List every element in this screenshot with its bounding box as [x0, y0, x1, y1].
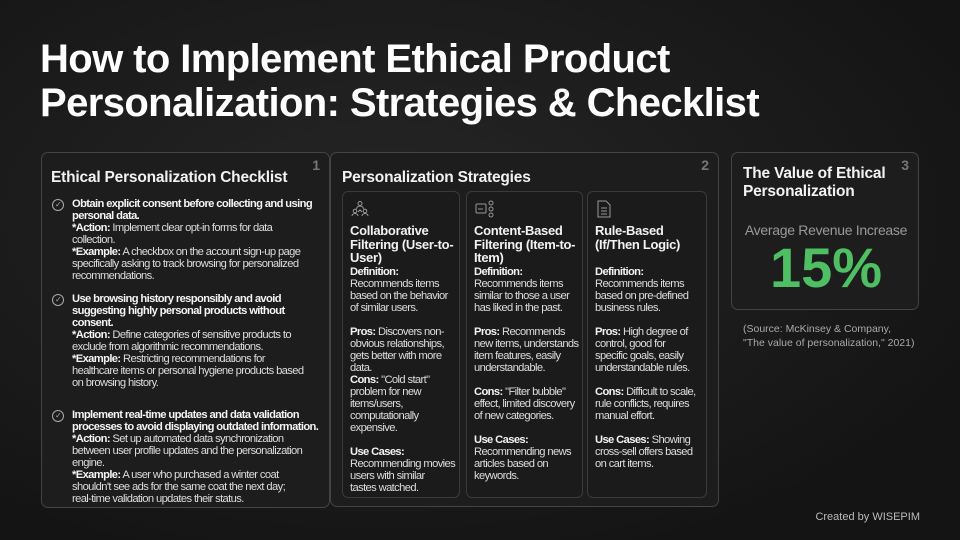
card: collaborative: Recommending movies — [350, 458, 455, 470]
checklist item 2 — [52, 293, 304, 389]
checklist item 2: exclude from algorithmic recommendations. — [72, 341, 263, 353]
card: collaborative: based on the behavior — [350, 290, 448, 302]
card: content-based: similar to those a user — [474, 290, 569, 302]
title: Personalization: Strategies & Checklist — [40, 81, 759, 125]
card: content-based: Cons: "Filter bubble" — [474, 386, 565, 398]
heading: value: Personalization — [743, 183, 855, 200]
panel: checklist — [41, 152, 330, 508]
card: rule-based: Definition: — [595, 266, 643, 278]
card: content-based: new items, understands — [474, 338, 579, 350]
card: content-based: Recommends items — [474, 278, 563, 290]
card: collaborative: Use Cases: — [350, 446, 404, 458]
stat label: Average Revenue Increase — [745, 222, 907, 238]
title — [40, 37, 760, 125]
card: rule-based: on cart items. — [595, 458, 653, 470]
heading: value: The Value of Ethical — [743, 165, 885, 182]
card: content-based: has liked in the past. — [474, 302, 562, 314]
card: collaborative: users with similar — [350, 470, 425, 482]
card: collaborative: Cons: "Cold start" — [350, 374, 429, 386]
card: collaborative: Recommends items — [350, 278, 439, 290]
card: rule-based: business rules. — [595, 302, 660, 314]
checklist item 1: *Example: A checkbox on the account sign-up page — [72, 246, 300, 258]
card: content-based: item features, easily — [474, 350, 560, 362]
heading: value — [743, 165, 885, 200]
checklist item 1 — [52, 198, 312, 282]
panel: value — [731, 152, 919, 310]
card: collaborative: obvious relationships, — [350, 338, 444, 350]
source note: "The value of personalization," 2021) — [743, 337, 914, 349]
card: collaborative: computationally — [350, 410, 418, 422]
checklist item 3 — [52, 409, 318, 505]
heading: strategies: Personalization Strategies — [342, 169, 531, 186]
card: content-based: Recommending news — [474, 446, 571, 458]
panel: checklist: ✓ — [55, 295, 61, 304]
checklist item 3: engine. — [72, 457, 104, 469]
card: collaborative: Pros: Discovers non- — [350, 326, 444, 338]
card: rule-based: Pros: High degree of — [595, 326, 688, 338]
card: content-based: of new categories. — [474, 410, 554, 422]
heading: checklist: Ethical Personalization Checklist — [51, 169, 287, 186]
card: collaborative: items/users, — [350, 398, 403, 410]
checklist item 1: Obtain explicit consent before collecting and using — [72, 198, 312, 210]
card: collaborative: data. — [350, 362, 372, 374]
checklist item 1: collection. — [72, 234, 115, 246]
stat: 15%: 15% — [770, 236, 882, 299]
checklist item 3: shouldn't see ads for the same coat the next day; — [72, 481, 285, 493]
checklist item 3: processes to avoid displaying outdated information. — [72, 421, 318, 433]
card: collaborative: Definition: — [350, 266, 398, 278]
card: content-based: effect, limited discovery — [474, 398, 575, 410]
checklist item 2: consent. — [72, 317, 113, 329]
checklist item 2: healthcare items or personal hygiene products based — [72, 365, 303, 377]
card: rule-based: cross-sell offers based — [595, 446, 692, 458]
card: content-based — [466, 191, 583, 498]
card: rule-based: understandable rules. — [595, 362, 690, 374]
card: collaborative: tastes watched. — [350, 482, 418, 494]
card: rule-based: rule conflicts, requires — [595, 398, 689, 410]
checklist item 3: Implement real-time updates and data validation — [72, 409, 299, 421]
checklist item 2: suggesting highly personal products without — [72, 305, 285, 317]
card: content-based: Use Cases: — [474, 434, 528, 446]
card: content-based: Filtering (Item-to- — [474, 236, 575, 252]
checklist item 2: *Action: Define categories of sensitive products to — [72, 329, 291, 341]
card: content-based: articles based on — [474, 458, 548, 470]
source note: (Source: McKinsey & Company, — [743, 323, 891, 335]
checklist item 2: on browsing history. — [72, 377, 158, 389]
card: rule-based — [587, 191, 707, 498]
card: rule-based: specific goals, easily — [595, 350, 683, 362]
icon: document — [598, 200, 610, 218]
card: rule-based: Cons: Difficult to scale, — [595, 386, 696, 398]
card: content-based: Definition: — [474, 266, 522, 278]
card: rule-based: manual effort. — [595, 410, 655, 422]
checklist item 3: between user profile updates and the personalization — [72, 445, 302, 457]
card: collaborative: gets better with more — [350, 350, 441, 362]
panel: value: 3 — [901, 157, 909, 173]
card: rule-based: (If/Then Logic) — [595, 236, 680, 252]
panel: strategies — [330, 152, 719, 507]
card: content-based: Pros: Recommends — [474, 326, 565, 338]
card: collaborative: expensive. — [350, 422, 397, 434]
card: collaborative: of similar users. — [350, 302, 418, 314]
checklist item 2: *Example: Restricting recommendations for — [72, 353, 265, 365]
icon: users — [352, 201, 368, 216]
card: content-based: understandable. — [474, 362, 545, 374]
source note — [743, 323, 914, 349]
checklist item 3: *Action: Set up automated data synchronization — [72, 433, 284, 445]
checklist item 1: recommendations. — [72, 270, 154, 282]
card: rule-based: control, good for — [595, 338, 665, 350]
card: collaborative — [342, 191, 460, 498]
card: rule-based: Use Cases: Showing — [595, 434, 690, 446]
card: content-based: keywords. — [474, 470, 519, 482]
checklist item 3: *Example: A user who purchased a winter coat — [72, 469, 279, 481]
panel: checklist: 1 — [312, 157, 320, 173]
panel: checklist: ✓ — [55, 411, 61, 420]
card: content-based: Content-Based — [474, 223, 563, 238]
card: content-based: Item) — [474, 250, 504, 265]
checklist item 3: real-time validation updates their status. — [72, 493, 244, 505]
card: rule-based: Rule-Based — [595, 223, 664, 238]
card: collaborative: problem for new — [350, 386, 421, 398]
card: rule-based: Recommends items — [595, 278, 684, 290]
checklist item 1: personal data. — [72, 210, 139, 222]
checklist item 1: *Action: Implement clear opt-in forms for data — [72, 222, 272, 234]
checklist item 1: specifically asking to track browsing for personalized — [72, 258, 298, 270]
panel: strategies: 2 — [701, 157, 709, 173]
icon: items — [476, 200, 494, 218]
credit: Created by WISEPIM — [815, 511, 920, 523]
panel: checklist: ✓ — [55, 200, 61, 209]
card: collaborative: Filtering (User-to- — [350, 236, 453, 252]
checklist item 2: Use browsing history responsibly and avoid — [72, 293, 281, 305]
title: How to Implement Ethical Product — [40, 37, 670, 81]
card: collaborative: Collaborative — [350, 223, 428, 238]
card: collaborative: User) — [350, 250, 382, 265]
card: rule-based: based on pre-defined — [595, 290, 688, 302]
